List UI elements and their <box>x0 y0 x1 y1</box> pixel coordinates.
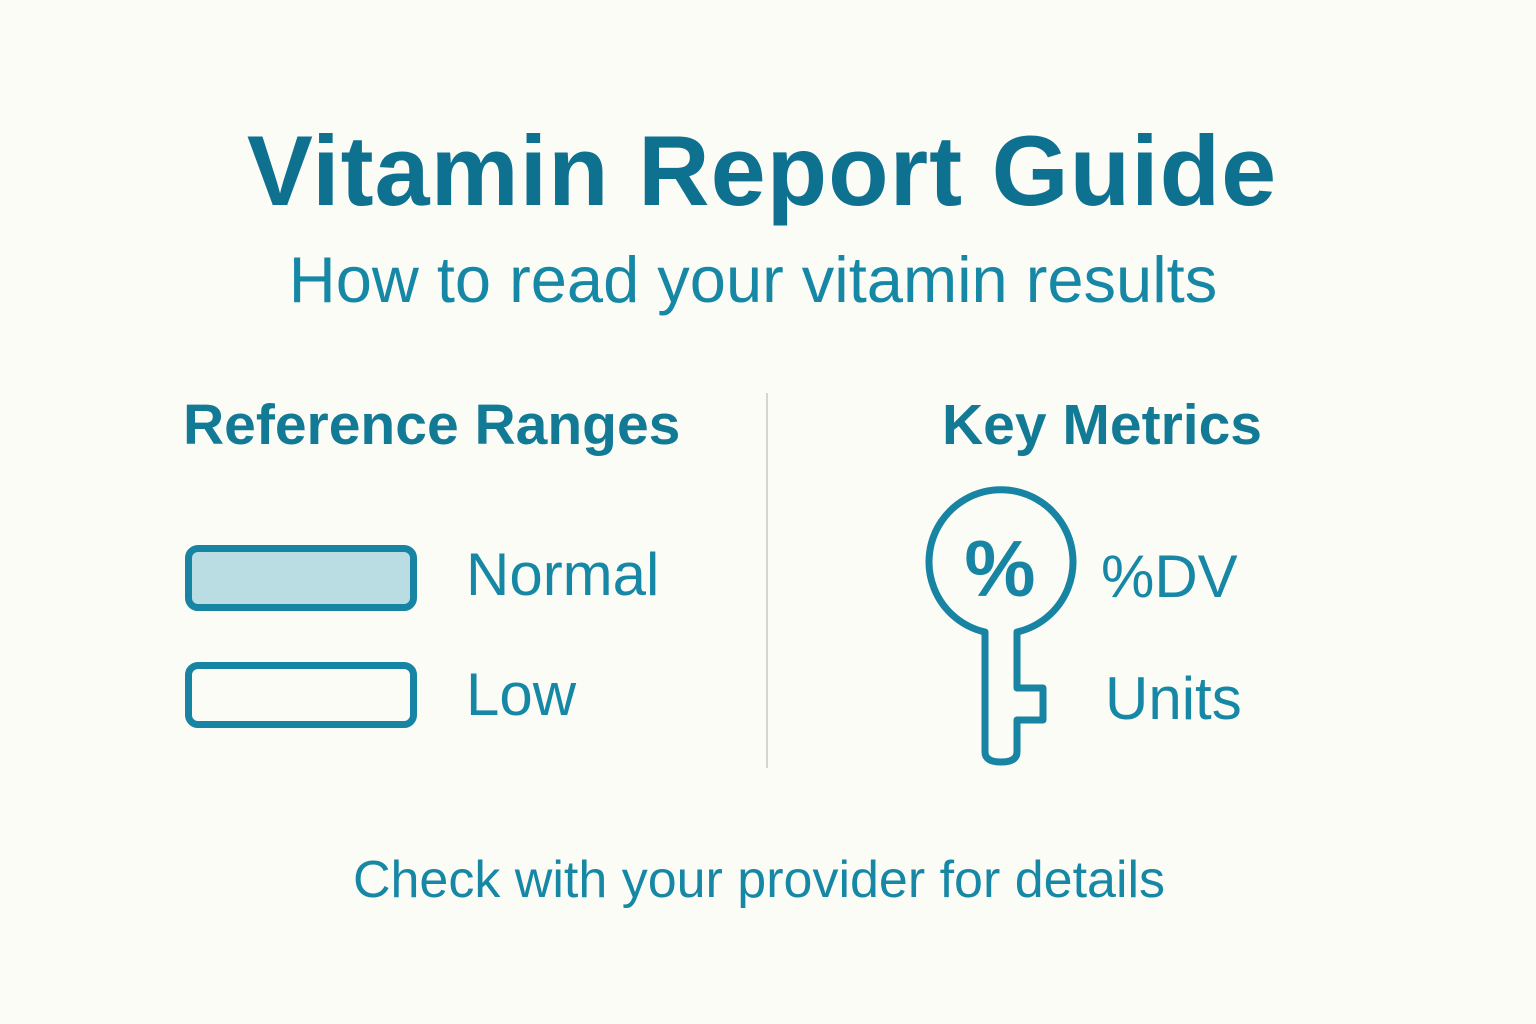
footer note: Check with your provider for details <box>353 851 1165 909</box>
label: low: Low <box>466 661 576 728</box>
icon: key with percent <box>925 486 1076 766</box>
swatch: low <box>185 662 417 728</box>
heading: reference ranges: Reference Ranges <box>183 393 680 457</box>
panel: reference ranges legend <box>185 541 659 728</box>
subtitle: How to read your vitamin results <box>289 243 1217 316</box>
swatch: normal <box>185 545 417 611</box>
divider line <box>766 393 768 768</box>
label: normal: Normal <box>466 541 659 608</box>
title: Vitamin Report Guide <box>247 115 1277 226</box>
heading: key metrics: Key Metrics <box>942 393 1262 457</box>
icon: key with percent: % <box>964 524 1036 613</box>
label: units: Units <box>1105 665 1242 732</box>
label: %DV: %DV <box>1101 543 1238 610</box>
